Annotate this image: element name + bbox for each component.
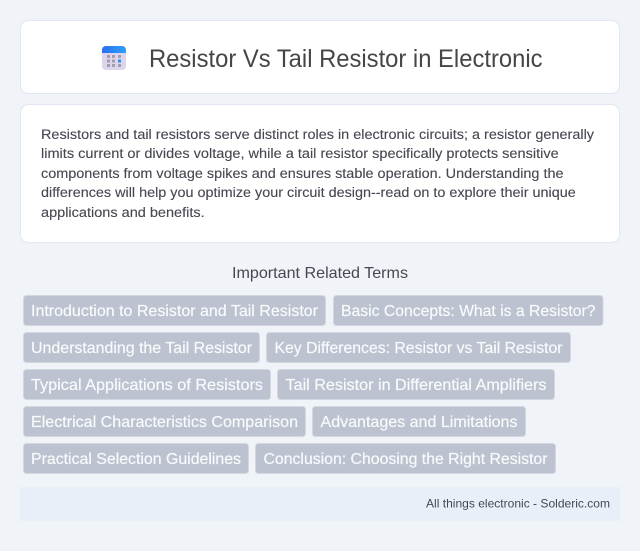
tag: selection guidelines: Practical Selection Guidelines (31, 451, 241, 468)
tag: understanding (24, 332, 260, 362)
intro paragraph: applications and benefits. (41, 205, 205, 221)
header panel (20, 20, 620, 94)
tag: key differences: Key Differences: Resistor vs Tail Resistor (274, 340, 563, 357)
intro paragraph: limits current or divides voltage, while a tail resistor specifically protects sensitive (41, 146, 559, 162)
tag: electrical characteristics: Electrical Characteristics Comparison (31, 414, 298, 431)
tag: key differences (266, 332, 570, 362)
tag: selection guidelines (24, 444, 248, 474)
tag: electrical characteristics (24, 406, 306, 436)
tag: differential amplifiers: Tail Resistor in Differential Amplifiers (286, 377, 546, 394)
title: Resistor Vs Tail Resistor in Electronic (149, 45, 542, 73)
intro paragraph: differences will help you optimize your circuit design--read on to explore their unique (41, 185, 576, 201)
tag: basic concepts: Basic Concepts: What is a Resistor? (341, 303, 596, 320)
panel: introduction (20, 104, 620, 242)
intro paragraph (41, 127, 595, 221)
tag: introduction: Introduction to Resistor and Tail Resistor (31, 303, 319, 320)
tag: conclusion: Conclusion: Choosing the Right Resistor (264, 451, 548, 468)
related terms tags (24, 296, 603, 474)
tag: differential amplifiers (278, 370, 554, 400)
tag: typical applications: Typical Applications of Resistors (31, 377, 263, 394)
footer bar (20, 487, 620, 521)
tag: basic concepts (334, 296, 603, 326)
tag: advantages: Advantages and Limitations (320, 414, 518, 431)
footer credit: All things electronic - Solderic.com (426, 496, 610, 510)
tag: understanding: Understanding the Tail Resistor (31, 340, 253, 357)
tag: advantages (312, 406, 526, 436)
intro paragraph: Resistors and tail resistors serve distinct roles in electronic circuits; a resistor generally (41, 127, 595, 143)
tag: conclusion (256, 444, 556, 474)
heading: important related terms: Important Related Terms (232, 265, 408, 282)
intro paragraph: components from voltage spikes and ensures stable operation. Understanding the (41, 166, 564, 182)
tag: typical applications (24, 370, 270, 400)
tag: introduction (24, 296, 326, 326)
icon: calendar grid (102, 46, 126, 70)
